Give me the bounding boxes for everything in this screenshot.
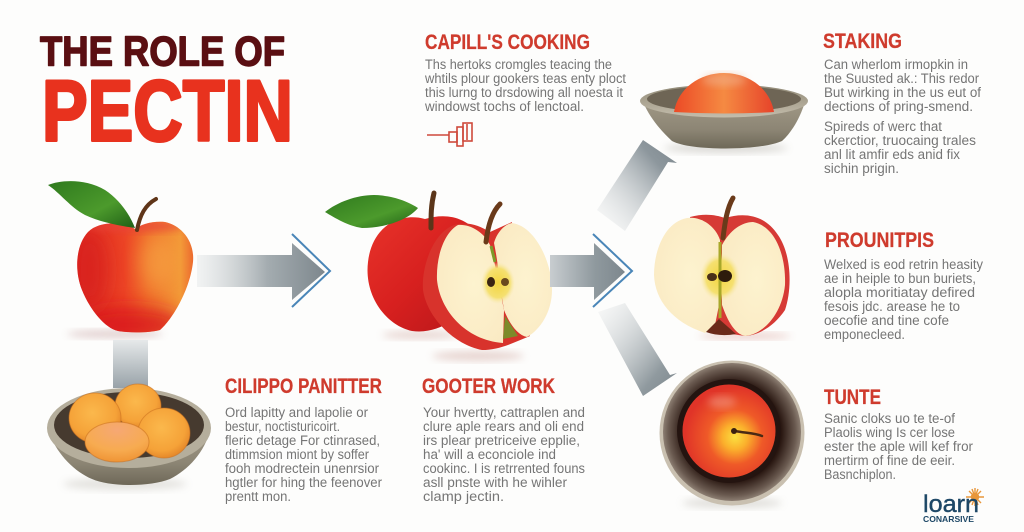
panel: Staking: Can wherlom irmopkin in	[824, 57, 968, 72]
panel: Cilippo Panitter: prentt mon.	[225, 489, 291, 504]
panel: Gooter Work	[422, 375, 585, 504]
arrow: apple to cut apple	[197, 234, 330, 307]
panel: Cilippo Panitter: fooh modrectein unenrsior	[225, 461, 380, 476]
panel: Tunte: ester the aple will kef fror	[824, 439, 974, 454]
title: THE ROLE OF	[40, 28, 285, 74]
panel: Prounitpis: fesois jdc. arease he to	[824, 299, 960, 314]
panel: Cilippo Panitter: CILIPPO PANITTER	[225, 375, 382, 398]
bowl of orange apples	[47, 384, 211, 490]
panel: Prounitpis: ae in heiple to bun buriets,	[824, 271, 976, 286]
panel: Capill's Cooking: windowst tochs of lenctoal.	[424, 99, 584, 114]
panel: Tunte	[824, 386, 974, 482]
panel: Prounitpis: PROUNITPIS	[825, 229, 934, 252]
panel: Tunte: mertirm of fine de eeir.	[824, 453, 955, 468]
arrow: diagonal up	[597, 140, 677, 231]
panel: Staking: But wirking in the us eut of	[824, 85, 981, 100]
whole apple	[325, 193, 480, 331]
panel: Tunte: TUNTE	[824, 386, 881, 409]
title: PECTIN	[42, 64, 293, 160]
panel: Staking: anl lit amfir eds anid fix	[824, 147, 960, 162]
panel: Prounitpis: emponecleed.	[824, 327, 905, 342]
logo	[923, 488, 984, 524]
panel: Staking	[823, 30, 981, 176]
arrow: cut apple to results	[550, 234, 632, 307]
panel: Cilippo Panitter: dtimmsion miont by soffer	[225, 447, 370, 462]
round pan with apple from above	[660, 360, 804, 508]
panel: Staking: the Suusted ak.: This redor	[824, 71, 980, 86]
panel: Prounitpis	[824, 229, 983, 342]
panel: Tunte: Plaolis wing Is cer lose	[824, 425, 955, 440]
panel: Capill's Cooking: this lurng to drsdowing all noesta it	[425, 85, 623, 100]
panel: Gooter Work: irs plear pretriceive epplie,	[423, 433, 580, 448]
panel: Cilippo Panitter	[225, 375, 383, 504]
apples in bowl	[69, 384, 190, 462]
panel: Capill's Cooking: Ths hertoks cromgles teacing the	[425, 57, 612, 72]
panel: Gooter Work: Your hvertty, cattraplen and	[423, 405, 585, 420]
panel: Capill's Cooking: CAPILL'S COOKING	[425, 31, 590, 54]
panel: Capill's Cooking: whtils plour gookers teas enty ploct	[424, 71, 626, 86]
icon: sun	[966, 488, 984, 506]
panel: Cilippo Panitter: hgtler for hing the feenover	[225, 475, 383, 490]
panel: Staking: STAKING	[823, 30, 902, 53]
apple with leaf	[48, 181, 200, 343]
cut apple half	[423, 204, 552, 350]
bowl with apple dome	[640, 73, 808, 153]
panel: Cilippo Panitter: Ord lapitty and lapolie or	[225, 405, 369, 420]
panel: Gooter Work: ha' will a econciole ind	[423, 447, 556, 462]
connector: apple to bowl	[113, 340, 148, 388]
panel: Cilippo Panitter: fleric detage For ctinrased,	[225, 433, 380, 448]
panel: Tunte: Basnchiplon.	[824, 467, 896, 482]
panel: Capill's Cooking	[424, 31, 626, 146]
panel: Staking: ckerctior, truocaing trales	[824, 133, 976, 148]
panel: Tunte: Sanic cloks uo te te-of	[824, 411, 955, 426]
title	[40, 28, 293, 160]
panel: Gooter Work: GOOTER WORK	[422, 375, 555, 398]
panel: Gooter Work: cookinc. I is retrrented founs	[423, 461, 585, 476]
whole and cut apple	[325, 193, 552, 361]
icon: measuring line and blocks	[427, 123, 472, 146]
panel: Staking: dections of pring-smend.	[824, 99, 973, 114]
panel: Prounitpis: Welxed is eod retrin heasity	[824, 257, 983, 272]
arrow: diagonal down	[598, 303, 677, 396]
panel: Cilippo Panitter: bestur, noctisturicoirt.	[225, 419, 340, 434]
panel: Staking: sichin prigin.	[824, 161, 899, 176]
panel: Prounitpis: oecofie and tine cofe	[824, 313, 949, 328]
panel: Gooter Work: asll pnste with he wihler	[423, 475, 568, 490]
halved apple	[654, 198, 791, 339]
panel: Staking: Spireds of werc that	[824, 119, 942, 134]
panel: Prounitpis: alopla moritiatay defired	[824, 285, 975, 300]
logo: loarn	[923, 491, 979, 518]
panel: Gooter Work: clamp jectin.	[423, 489, 504, 504]
logo: CONARSIVE	[923, 514, 974, 524]
panel: Gooter Work: clure aple rears and oli end	[423, 419, 584, 434]
